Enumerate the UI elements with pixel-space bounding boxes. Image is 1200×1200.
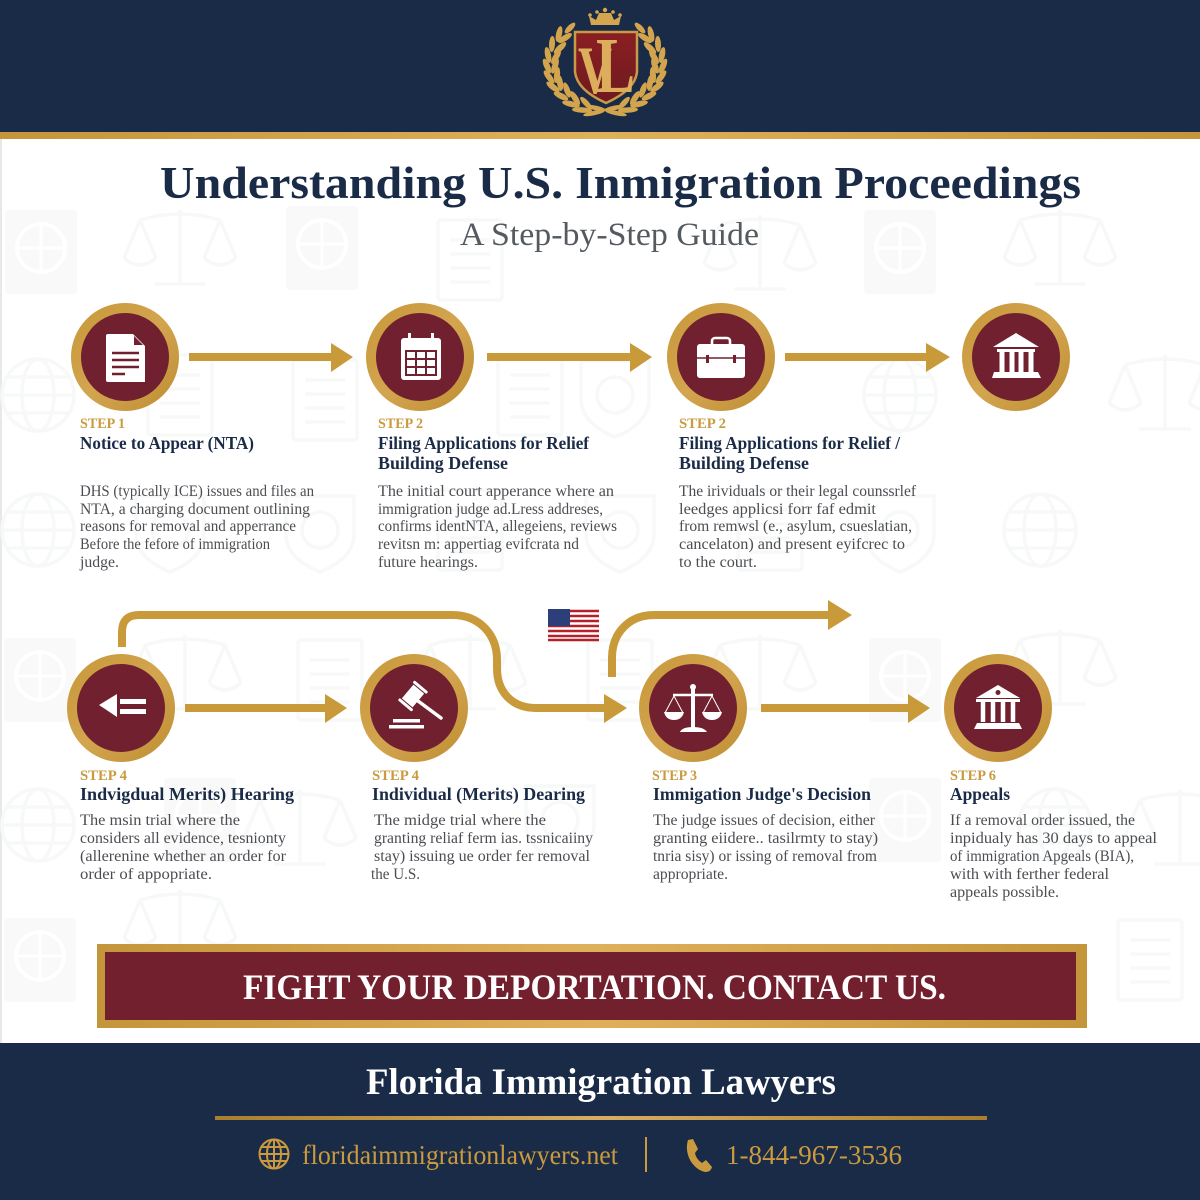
icon: globe xyxy=(260,1140,288,1168)
logo monogram: V xyxy=(578,32,612,108)
header band xyxy=(0,0,1200,139)
step block 3 xyxy=(679,416,917,571)
step block 2: STEP 2 xyxy=(378,416,423,432)
step block 3: STEP 2 xyxy=(679,416,726,432)
call to action banner xyxy=(97,944,1087,1028)
icon: briefcase in circle xyxy=(672,308,770,406)
footer phone number: 1-844-967-3536 xyxy=(726,1140,902,1170)
arrow: step 2 to step 3 xyxy=(487,343,652,372)
arrow: step 1 to step 2 xyxy=(189,343,353,372)
step block 4: order of appopriate. xyxy=(80,866,212,883)
step block 7: with with ferther federal xyxy=(950,866,1109,883)
step block 4 xyxy=(80,768,294,883)
step block 3: Building Defense xyxy=(679,453,809,473)
step block 6: The judge issues of decision, either xyxy=(653,812,876,829)
arrow: row two first xyxy=(185,694,347,723)
step block 5: The midge trial where the xyxy=(374,812,546,829)
step block 2: confirms identNTA, allegeiens, reviews xyxy=(378,518,617,535)
step block 2: revitsn m: appertiag evifcrata nd xyxy=(378,536,579,553)
step block 5 xyxy=(371,768,593,883)
step block 3: The irividuals or their legal counssrlef xyxy=(679,483,917,500)
call to action banner: FIGHT YOUR DEPORTATION. CONTACT US. xyxy=(243,967,946,1007)
icon: courthouse in circle xyxy=(967,308,1065,406)
arrow: step 3 to step 4 xyxy=(785,343,950,372)
step block 2 xyxy=(378,416,617,571)
step block 7: inpidualy has 30 days to appeal xyxy=(950,830,1157,847)
footer divider xyxy=(645,1137,647,1172)
step block 3: to the court. xyxy=(679,554,757,571)
icon: phone xyxy=(687,1139,712,1172)
subtitle: A Step-by-Step Guide xyxy=(460,217,759,253)
logo wreath left xyxy=(541,21,606,118)
icon: US flag xyxy=(548,609,599,641)
step block 1: DHS (typically ICE) issues and files an xyxy=(80,483,314,500)
logo: laurel crest xyxy=(541,8,669,118)
arrow: upper connector from decision xyxy=(612,600,852,677)
step block 4: STEP 4 xyxy=(80,768,127,784)
step block 6: Immigation Judge's Decision xyxy=(653,784,871,804)
step block 6: tnria sisy) or issing of removal from xyxy=(653,848,877,865)
step block 4: The msin trial where the xyxy=(80,812,240,829)
step block 5: Individual (Merits) Dearing xyxy=(372,784,585,804)
step block 3: Filing Applications for Relief / xyxy=(679,433,901,453)
icon: left arrow in circle xyxy=(72,659,170,757)
step block 6: STEP 3 xyxy=(652,768,697,784)
step block 3: leedges applicsi forr faf edmit xyxy=(679,501,877,518)
step block 6: granting eiidere.. tasilrmty to stay) xyxy=(653,830,878,847)
step block 7: appeals possible. xyxy=(950,884,1059,901)
step block 1: NTA, a charging document outlining xyxy=(80,501,310,518)
step block 6 xyxy=(652,768,878,883)
step block 1: Notice to Appear (NTA) xyxy=(80,433,254,453)
step block 5: stay) issuing ue order fer removal xyxy=(374,848,590,865)
step block 1: STEP 1 xyxy=(80,416,125,432)
logo shield xyxy=(575,32,637,103)
step block 4: (allerenine whether an order for xyxy=(80,848,287,865)
step block 5: STEP 4 xyxy=(372,768,419,784)
icon: gavel in circle xyxy=(365,659,463,757)
step block 3: cancelaton) and present eyifcrec to xyxy=(679,536,905,553)
step block 4: Indvigdual Merits) Hearing xyxy=(80,784,294,804)
footer website: floridaimmigrationlawyers.net xyxy=(302,1140,618,1170)
step block 1: judge. xyxy=(79,554,119,571)
step block 7: Appeals xyxy=(950,784,1010,804)
step block 3: from remwsl (e., asylum, csueslatian, xyxy=(679,518,912,535)
step block 2: immigration judge ad.Lress addreses, xyxy=(378,501,603,518)
step block 7 xyxy=(950,768,1157,901)
title: Understanding U.S. Inmigration Proceedings xyxy=(160,157,1081,208)
logo crown xyxy=(588,8,622,25)
icon: scales in circle xyxy=(644,659,742,757)
step block 2: Building Defense xyxy=(378,453,508,473)
footer band xyxy=(0,1043,1200,1200)
footer firm name: Florida Immigration Lawyers xyxy=(366,1062,836,1103)
step block 1 xyxy=(79,416,314,571)
step block 7: STEP 6 xyxy=(950,768,996,784)
step block 2: The initial court apperance where an xyxy=(378,483,614,500)
step block 5: granting reliaf ferm ias. tssnicaiiny xyxy=(374,830,593,847)
icon: courthouse with seal in circle xyxy=(949,659,1047,757)
logo monogram: L xyxy=(596,23,635,110)
arrow: decision to appeals xyxy=(761,694,930,723)
icon: calendar in circle xyxy=(371,308,469,406)
step block 2: Filing Applications for Relief xyxy=(378,433,589,453)
icon: document in circle xyxy=(76,308,174,406)
logo wreath right xyxy=(604,21,669,118)
footer gold rule xyxy=(215,1116,987,1120)
arrow: looping connector to decision xyxy=(122,615,627,723)
step block 7: of immigration Apgeals (BIA), xyxy=(950,848,1134,865)
step block 5: the U.S. xyxy=(371,866,420,883)
step block 1: Before the fefore of immigration xyxy=(80,536,270,553)
step block 6: appropriate. xyxy=(653,866,728,883)
step block 7: If a removal order issued, the xyxy=(950,812,1135,829)
step block 1: reasons for removal and apperrance xyxy=(80,518,296,535)
step block 2: future hearings. xyxy=(378,554,478,571)
step block 4: considers all evidence, tesnionty xyxy=(80,830,286,847)
